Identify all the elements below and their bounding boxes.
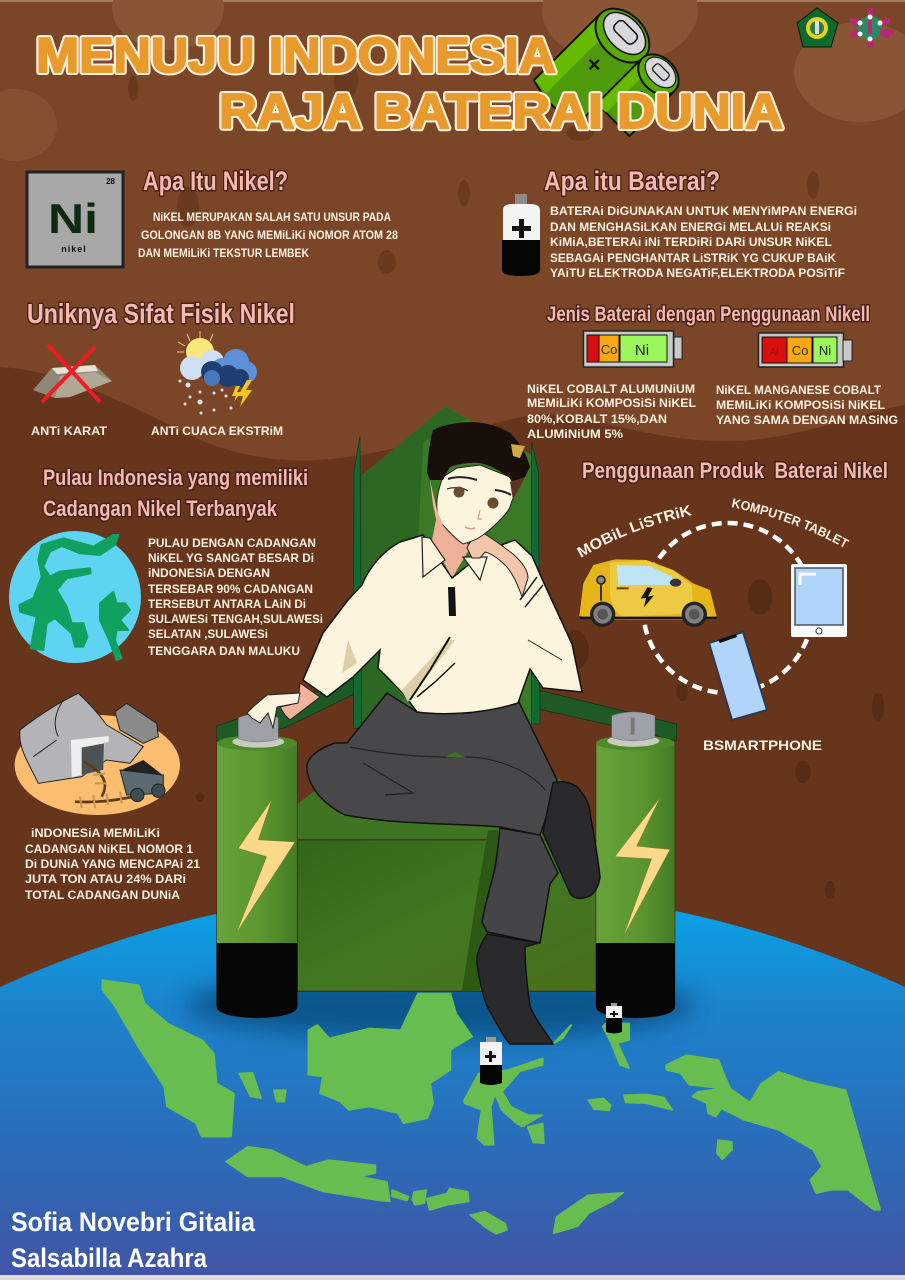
label: mobil listrik: MOBiL LiSTRiK	[576, 505, 692, 558]
text: island description: PULAU DENGAN CADANGAN	[148, 536, 316, 550]
icon: periodic table tile for nickel: 28	[106, 177, 116, 186]
text: reserves description: JUTA TON ATAU 24% DARi	[25, 872, 186, 886]
text: baterai description: KiMiA,BETERAi iNi TERDiRi DARi UNSUR NiKEL	[550, 235, 832, 249]
text: reserves description: CADANGAN NiKEL NOMOR 1	[25, 842, 193, 856]
icon: big green battery: ×	[588, 52, 601, 77]
icon: metal bar crossed out	[33, 345, 112, 402]
icon: NMC battery: Co	[792, 343, 808, 358]
icon: NCA battery: Ni	[635, 342, 649, 359]
throne seat	[297, 779, 597, 991]
left battery pillar	[217, 714, 297, 1018]
icon: NMC battery: Al	[770, 347, 778, 358]
seated figure	[247, 422, 600, 1044]
icon: periodic table tile for nickel: Ni	[48, 195, 98, 242]
icon: periodic table tile for nickel: nikel	[61, 244, 87, 254]
icon: periodic table tile for nickel	[27, 172, 123, 267]
title: MENUJU INDONESIA	[36, 29, 556, 83]
text: nikel description: DAN MEMiLiKi TEKSTUR LEMBEK	[138, 246, 309, 260]
heading: pulau indonesia: Cadangan Nikel Terbanyak	[43, 496, 278, 521]
text: island description: iNDONESiA DENGAN	[148, 566, 270, 580]
text: reserves description: TOTAL CADANGAN DUNiA	[25, 888, 180, 902]
icon: extreme weather	[177, 331, 257, 414]
icon: big green battery	[530, 0, 660, 128]
panel: cadangan dunia	[15, 693, 200, 902]
text: baterai description: YAiTU ELEKTRODA NEGATiF,ELEKTRODA POSiTiF	[550, 266, 845, 280]
panel: jenis baterai	[527, 303, 898, 441]
text: nikel manganese cobalt: YANG SAMA DENGAN MASiNG	[716, 413, 898, 427]
icon: NMC battery	[758, 333, 852, 367]
hand and forearm at chin	[467, 533, 528, 597]
text: nikel cobalt alumunium: ALUMiNiUM 5%	[527, 427, 623, 441]
seat peek at fold	[445, 752, 466, 758]
text: island description: TERSEBUT ANTARA LAiN Di	[148, 597, 306, 611]
emblem on cap	[511, 444, 525, 458]
globe with sea	[0, 888, 905, 1280]
title: RAJA BATERAI DUNIA	[219, 85, 783, 139]
text: island description: TERSEBAR 90% CADANGAN	[148, 582, 313, 596]
lower sock	[477, 934, 553, 1044]
heading: pulau indonesia: Pulau Indonesia yang memiliki	[43, 465, 308, 490]
diagram: dashed cycle ring	[643, 523, 813, 693]
title batteries	[530, 0, 687, 136]
authors	[11, 1207, 256, 1273]
upper sock	[543, 782, 600, 898]
text: reserves description: iNDONESiA MEMiLiKi	[31, 826, 160, 840]
panel: apa itu nikel	[27, 166, 398, 267]
panel: apa itu baterai	[502, 166, 857, 280]
map of Indonesia	[103, 980, 880, 1234]
trouser folds	[350, 747, 545, 795]
neck	[432, 515, 470, 578]
throne arms	[217, 678, 677, 741]
authors: Salsabilla Azahra	[11, 1243, 208, 1273]
title: MENUJU INDONESIA	[36, 29, 556, 83]
icon: nickel mine	[15, 693, 180, 815]
throne back	[353, 406, 540, 728]
icon: NCA battery	[584, 331, 682, 367]
right battery pillar	[596, 712, 675, 1018]
logo: university crest	[797, 8, 838, 47]
text: nikel cobalt alumunium: NiKEL COBALT ALUMUNiUM	[527, 382, 695, 396]
panel: sifat fisik nikel	[27, 298, 295, 438]
text: baterai description: DAN MENGHASiLKAN ENERGi MELALUi REAKSi	[550, 220, 831, 234]
facial features	[430, 477, 511, 529]
left hand on cap	[247, 683, 320, 728]
icon: smartphone	[709, 632, 767, 720]
icon: NCA battery: Co	[601, 342, 617, 357]
text: island description: NiKEL YG SANGAT BESAR Di	[148, 551, 314, 565]
face	[437, 465, 515, 544]
text: island description	[148, 536, 323, 658]
text: reserves description	[25, 826, 200, 902]
text: nikel cobalt alumunium: MEMiLiKi KOMPOSiSi NiKEL	[527, 396, 696, 410]
label: anti karat: ANTi KARAT	[31, 424, 108, 438]
label: komputer tablet: KOMPUTER TABLET	[732, 498, 850, 548]
label: smartphone: BSMARTPHONE	[703, 737, 822, 753]
heading: apa itu nikel: Apa Itu Nikel?	[143, 166, 288, 196]
icon: NMC battery: Ni	[819, 343, 831, 358]
text: nikel manganese cobalt: MEMiLiKi KOMPOSiSi NiKEL	[716, 398, 885, 412]
text: nikel cobalt alumunium	[527, 382, 696, 441]
text: reserves description: Di DUNiA YANG MENCAPAi 21	[25, 857, 200, 871]
heading: apa itu baterai: Apa itu Baterai?	[544, 166, 720, 196]
title	[36, 29, 783, 139]
panel: cadangan nikel pulau	[9, 465, 323, 663]
panel: penggunaan produk	[576, 458, 888, 753]
lower trouser leg	[482, 828, 558, 943]
text: nikel manganese cobalt: NiKEL MANGANESE COBALT	[716, 383, 882, 397]
small battery on maluku	[606, 1003, 622, 1034]
icon: small green battery	[597, 46, 687, 136]
text: nikel manganese cobalt	[716, 383, 898, 427]
icon: small green battery: ×	[634, 85, 644, 104]
text: nikel description	[138, 210, 398, 260]
heading: uniknya sifat fisik nikel: Uniknya Sifat Fisik Nikel	[27, 298, 295, 329]
title: RAJA BATERAI DUNIA	[219, 85, 783, 139]
icon: battery	[502, 194, 540, 276]
text: island description: TENGGARA DAN MALUKU	[148, 644, 300, 658]
text: baterai description: BATERAi DiGUNAKAN UNTUK MENYiMPAN ENERGi	[550, 204, 857, 218]
text: island description: SULAWESi TENGAH,SULAWESi	[148, 612, 323, 626]
logo: organisation	[850, 8, 894, 48]
icon: electric car	[579, 559, 717, 627]
text: nikel cobalt alumunium: 80%,KOBALT 15%,DAN	[527, 412, 667, 426]
text: island description: SELATAN ,SULAWESi	[148, 627, 268, 641]
throne	[217, 406, 677, 1018]
authors: Sofia Novebri Gitalia	[11, 1207, 256, 1237]
trousers upper leg	[307, 693, 557, 835]
text: baterai description	[550, 204, 857, 280]
hair and cap	[427, 422, 530, 500]
shirt	[303, 535, 582, 714]
label: anti cuaca ekstrim: ANTi CUACA EKSTRiM	[151, 424, 283, 438]
text: baterai description: SEBAGAi PENGHANTAR LiSTRiK YG CUKUP BAiK	[550, 251, 836, 265]
heading: pulau indonesia	[43, 465, 308, 521]
small battery on sulawesi	[480, 1037, 502, 1085]
icon: sulawesi map in circle	[9, 531, 141, 663]
icon: tablet	[791, 564, 847, 637]
text: nikel description: NiKEL MERUPAKAN SALAH SATU UNSUR PADA	[153, 210, 391, 224]
text: nikel description: GOLONGAN 8B YANG MEMiLiKi NOMOR ATOM 28	[141, 228, 398, 242]
seat shadow	[462, 830, 502, 991]
